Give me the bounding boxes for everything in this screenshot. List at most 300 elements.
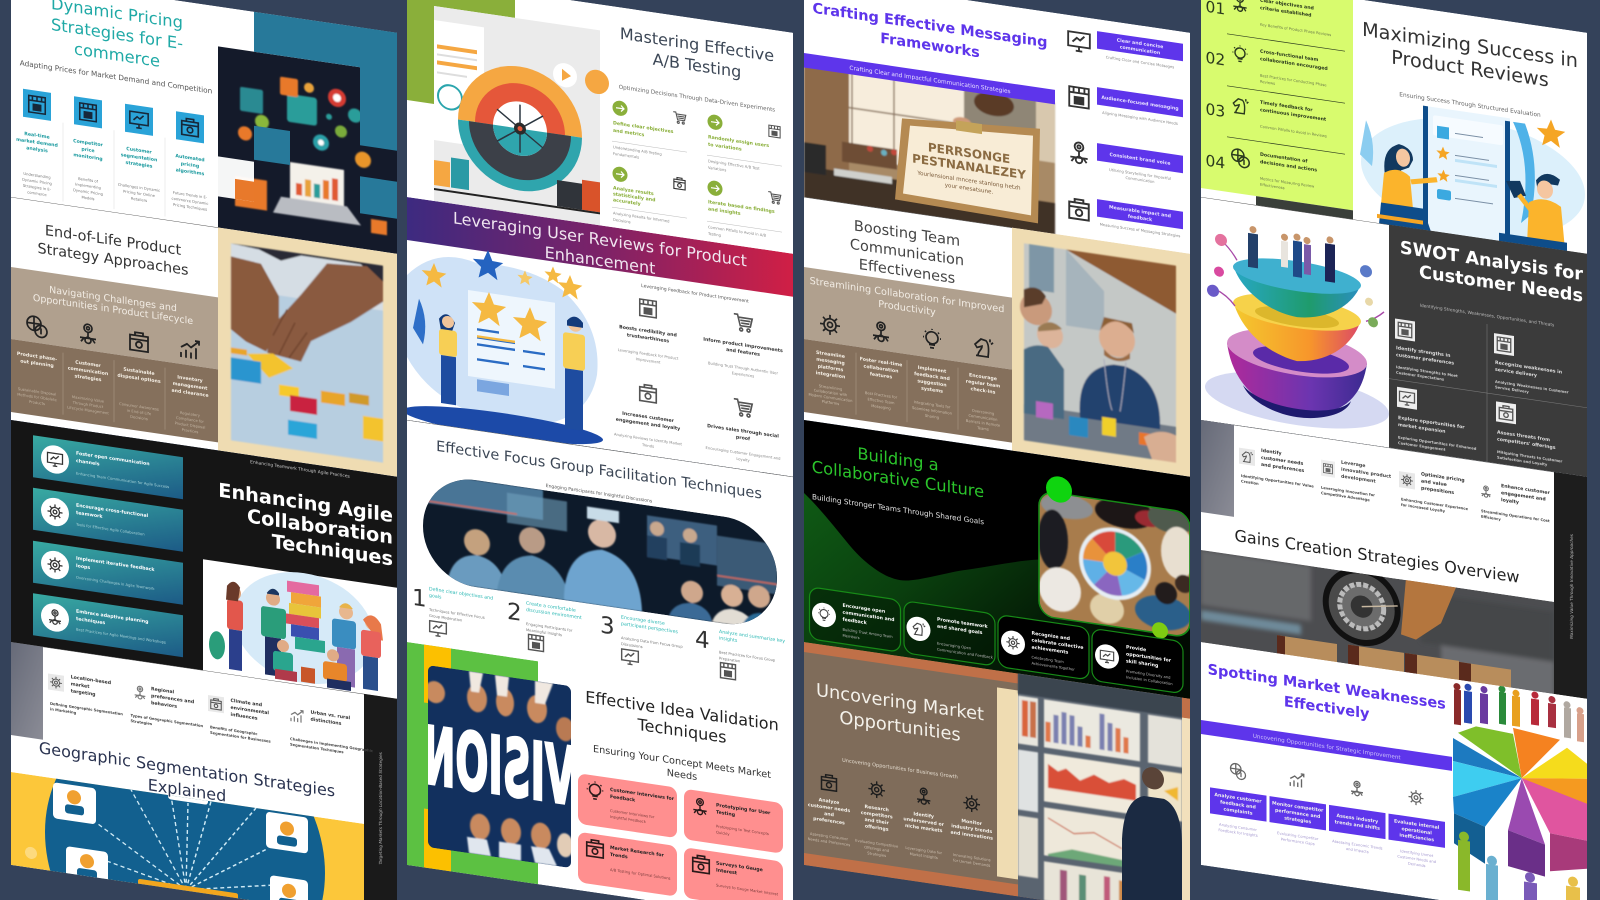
title: Strategies for E- (51, 15, 183, 53)
item: urban rural: distinctions (310, 717, 342, 727)
title: Spotting Market Weaknesses (1208, 661, 1446, 713)
item 04: 04 (1206, 152, 1225, 173)
item: suggestion systems: suggestion (917, 378, 947, 389)
title: commerce (74, 39, 160, 71)
green frame (407, 642, 538, 884)
icon: window (640, 384, 656, 403)
item: communication: communication (68, 365, 108, 377)
item: clear concise: Clear and concise (1117, 37, 1163, 50)
item: climate: environmental (230, 705, 269, 716)
item: analyze: accurately (613, 197, 641, 207)
item: internal: Identifying Unmet (1400, 849, 1434, 858)
item 1: Techniques for Effective Focus (428, 608, 485, 620)
card: cross-functional: teamwork (76, 510, 103, 520)
card: interviews: Insightful Feedback (610, 815, 647, 824)
icon: chess tile (1239, 448, 1255, 466)
card: prototyping: Prototyping for User (716, 802, 771, 817)
item: innovation: Leveraging Innovation for (1321, 486, 1375, 498)
item: iterate: Iterate based on findings (708, 199, 775, 215)
icon: tile (1397, 387, 1417, 410)
card: interviews (578, 773, 677, 838)
item: innovation: development (1341, 474, 1376, 485)
item 04: decisions and actions (1260, 159, 1317, 174)
item: engagement: Analyzing Reviews to Identify Market (614, 432, 683, 446)
title: Collaboration (247, 504, 393, 549)
icon: window (769, 125, 780, 138)
dark band (804, 339, 1012, 443)
icon: package (208, 695, 224, 713)
item: customer needs: Creation (1241, 479, 1259, 486)
card: skill sharing (1092, 628, 1183, 694)
item: regional (130, 683, 204, 734)
subtitle: Building Stronger Teams Through Shared Goals (812, 492, 984, 526)
item: real-time: Real-time (24, 131, 50, 141)
framed sign: Yourlensional mncere stanlong hetzh (916, 171, 1021, 192)
item: disposal (117, 330, 161, 423)
item: real-time collaboration: Effective Team (868, 397, 895, 405)
panel: collaborative culture (804, 420, 1196, 701)
photo: hands on sticky notes (231, 243, 383, 463)
black side strip (364, 694, 397, 900)
item: social proof: Drives sales through social (707, 423, 779, 440)
panel: geographic segmentation (11, 642, 397, 900)
item: measurable: Measuring Success of Messaging Strategies (1100, 222, 1180, 238)
icon: monitor (622, 649, 638, 666)
item: segmentation: Pricing for Online (123, 190, 156, 198)
item: competitor: Benefits of (78, 177, 99, 184)
item: analyze: Analyze results (613, 185, 654, 197)
item: industry (1329, 777, 1386, 857)
icon: monitor (430, 621, 446, 637)
icon: target (1481, 485, 1491, 498)
title: Uncovering Market (816, 680, 984, 725)
panel: market weaknesses (1201, 642, 1587, 900)
item: clear concise: Crafting Clear and Concise Messages (1106, 55, 1174, 69)
icon: target (1233, 0, 1247, 12)
icon: chess (1233, 97, 1248, 114)
framed sign (895, 107, 1040, 224)
item: check-ins: Encourage (969, 372, 997, 382)
cell: threats: Satisfaction and Loyalty (1497, 456, 1548, 467)
cell: strengths: Identify strengths in (1396, 345, 1450, 359)
item 04: Documentation of (1260, 152, 1308, 165)
item: check-ins: Teams (976, 426, 989, 432)
subtitle: Streamlining Collaboration for Improved (810, 276, 1004, 315)
cell: strengths (1395, 319, 1458, 384)
item 03: Timely feedback for (1260, 100, 1313, 113)
panel: user reviews (403, 196, 793, 480)
card: open communication: Encourage open (842, 603, 885, 615)
item: platforms: Collaboration with (814, 388, 848, 397)
framed sign: your enesatsune. (945, 183, 993, 196)
item: customer needs: customer needs (808, 802, 850, 814)
item: inventory: and clearance (171, 388, 209, 399)
item 04 (1206, 144, 1317, 195)
item: segmentation: strategies (126, 160, 153, 170)
item: disposal: in End-of-Life (127, 409, 152, 416)
item: competitor: performance and (1275, 808, 1320, 820)
item: inform improvements (703, 309, 783, 383)
item: internal: inefficiencies (1399, 832, 1434, 843)
item 2: Meaningful Insights (526, 628, 562, 637)
item 02: collaboration encouraged (1260, 56, 1328, 72)
item: assign users: Randomly assign users (708, 134, 769, 149)
item: phase-out: Sustainable Disposal (18, 387, 56, 397)
card: prototyping (684, 789, 783, 854)
dark strip (1256, 196, 1353, 220)
item: competitors (855, 778, 899, 860)
card: feedback loops: Overcoming Challenges in Agile Teamwork (76, 576, 155, 591)
subtitle: Ensuring Success Through Structured Evaluation (1399, 92, 1541, 119)
photo: gauge and wood blocks (1201, 544, 1554, 697)
item: climate: influences (230, 712, 258, 722)
card: adaptive planning: Best Practices for Agile Meetings and Workshops (76, 628, 166, 645)
item 04: Effectiveness (1260, 183, 1285, 190)
item: location-based: targeting (71, 688, 96, 698)
item 1: goals (429, 593, 442, 601)
item: suggestion systems: Seamless Information (912, 406, 953, 416)
icon: chess (975, 337, 993, 358)
item: real-time collaboration: Best Practices for (865, 391, 898, 400)
gray block (1201, 420, 1234, 517)
item: feedback (1210, 760, 1266, 839)
item: urban rural (290, 707, 373, 759)
item: real-time: Understanding (23, 172, 51, 180)
subtitle: Uncovering Opportunities for Business Growth (842, 758, 958, 781)
item 4: Analyze and summarize key (719, 629, 785, 645)
item: engagement: loyalty (1501, 497, 1519, 506)
icon: cart (673, 112, 686, 124)
item 2 (507, 598, 582, 657)
item: real-time (16, 88, 58, 199)
item: phase-out (17, 314, 57, 408)
title: Effectively (1284, 693, 1370, 723)
subtitle: Productivity (878, 299, 936, 318)
item: inform improvements: and features (726, 347, 760, 358)
cell: strengths: Identifying Strengths to Meet (1396, 365, 1458, 378)
item: inventory: Product Disposal (175, 421, 205, 430)
item: internal: Demands (1408, 862, 1426, 868)
item: competitor: monitoring (73, 152, 103, 162)
cell: weaknesses: service delivery (1495, 367, 1537, 379)
item: communication: Customer (75, 359, 101, 369)
item: climate (208, 694, 272, 744)
item 02: Cross-functional team (1260, 49, 1318, 63)
subtitle: Needs (667, 768, 697, 783)
item: customer needs: Analyze (819, 797, 839, 806)
card: surveys (684, 847, 783, 900)
title: Effectiveness (859, 256, 955, 287)
item 01: Key Benefits of Product Phase Reviews (1260, 23, 1331, 37)
card: prototyping: Quickly (716, 830, 730, 837)
item: iterate (707, 180, 782, 247)
title: Effective Focus Group Facilitation Techniques (436, 438, 762, 503)
item: analyze: statistically and (613, 191, 655, 204)
terracotta bands (804, 642, 1190, 900)
card: surveys: Surveys to Gauge Market Interest (716, 883, 779, 897)
item 3: Analyzing Data from Focus Group (621, 636, 683, 649)
subtitle band: Crafting Clear and Impactful Communication Strategies (849, 66, 1011, 95)
item: industry: Assess industry (1336, 813, 1378, 825)
item 2: 2 (507, 599, 522, 627)
item 4 (695, 625, 785, 687)
item: platforms: platforms (818, 364, 844, 373)
card: market research: Trends (610, 852, 628, 860)
gradient band (407, 197, 793, 297)
item: check-ins: Barriers in Remote (966, 419, 1001, 428)
item: inventory (171, 338, 209, 436)
item: competitor: Models (82, 195, 95, 201)
cell: opportunities (1397, 387, 1477, 457)
card: cross-functional: Encourage cross-functional (76, 503, 148, 519)
card: open communication: feedback (842, 617, 868, 626)
item 02: Best Practices for Conducting Phase (1260, 74, 1327, 88)
icon: chess (913, 622, 925, 636)
item: inventory: Inventory (177, 374, 203, 384)
card: achievements (998, 615, 1089, 680)
person silhouette (1142, 766, 1164, 791)
item 1 (412, 584, 493, 644)
item: social proof: Encouraging Customer Engagement and (706, 446, 781, 461)
icon: target (873, 321, 889, 342)
card: adaptive planning (33, 593, 183, 657)
teal frame blocks (254, 12, 397, 219)
item: engagement (614, 380, 683, 453)
item: check-ins (966, 336, 1001, 433)
icon: shop (74, 96, 102, 128)
icon: rocket (587, 780, 603, 800)
card: skill sharing: Provide (1126, 644, 1146, 653)
column 1 (11, 0, 397, 900)
item: industry: Assessing Economic Trends (1332, 839, 1383, 851)
divider lines (63, 123, 165, 217)
icon: cart (734, 399, 752, 418)
item: engagement (1481, 480, 1550, 529)
card: feedback loops: Implement iterative feedback (76, 556, 155, 573)
photo: fists around vision (423, 664, 575, 869)
item: regional: Types of Geographic Segmentation (130, 714, 204, 728)
item: customer needs: customer needs (1261, 455, 1303, 467)
panel: dynamic pricing (11, 0, 397, 256)
card: interviews: Customer Interviews for (610, 787, 675, 802)
item 1: Group Moderation (429, 614, 463, 623)
item: innovation: Leverage (1341, 460, 1365, 469)
illustration: layered funnel (1205, 218, 1389, 439)
column 2 (403, 0, 793, 900)
column 3 (804, 0, 1196, 900)
item: automated: commerce Dynamic (172, 197, 208, 206)
vertical caption: Targeting Markets Through Location-Based Strategies (378, 752, 383, 866)
item: engagement: Efficiency (1481, 515, 1501, 522)
card: adaptive planning: techniques (76, 616, 105, 626)
item: clear concise: communication (1120, 44, 1160, 56)
item: check-ins: Communication (968, 414, 998, 422)
item: niche markets: Identify (913, 811, 934, 820)
icon: businessman (1351, 781, 1363, 797)
icon: team (48, 503, 62, 521)
subtitle: Identifying Strengths, Weaknesses, Opportunities, and Threats (1420, 303, 1555, 329)
card: foster: Foster open communication (76, 451, 150, 467)
dark panel (1389, 225, 1587, 477)
item: competitors: Offerings and (864, 845, 890, 853)
panel: idea validation (407, 642, 793, 900)
cell: opportunities: Customer Engagement (1398, 441, 1446, 452)
item: phase-out: out planning (20, 358, 54, 369)
cream frame (218, 227, 397, 477)
item: suggestion systems: Sharing (925, 414, 940, 420)
icon: shop (640, 299, 656, 318)
item 02: 02 (1206, 49, 1225, 70)
cell: opportunities: Exploring Opportunities for Enhanced (1398, 435, 1477, 451)
title: Communication (850, 236, 964, 270)
item: customer needs: preferences (813, 816, 845, 827)
item: platforms: integration (816, 370, 845, 380)
item: inform improvements: Experiences (732, 371, 754, 379)
item: objectives: Fundamentals (613, 152, 639, 160)
item: platforms: Streamline (816, 350, 845, 360)
item: customer needs: Assessing Consumer (810, 832, 849, 842)
item: platforms: messaging (816, 357, 845, 367)
image: tech network and laptop (218, 46, 397, 256)
item: inventory: management (173, 381, 208, 392)
subtitle: Engaging Participants for Insightful Discussions (546, 483, 653, 505)
cell: threats: Assess threats from (1497, 430, 1550, 443)
item: clear concise (1068, 27, 1183, 71)
title: Crafting Effective Messaging (813, 0, 1047, 51)
item: segmentation (118, 103, 160, 205)
item: pricing (1399, 468, 1468, 517)
item: innovation: innovative product (1341, 467, 1392, 480)
icon: tile (1395, 319, 1415, 341)
item: competitor: Implementing (75, 182, 101, 190)
item: social proof: Loyalty (736, 457, 750, 463)
card: shared goals: Communication and Feedback (937, 648, 994, 660)
card: feedback loops: loops (76, 563, 90, 571)
item: real-time: market demand (16, 137, 58, 149)
title: Explained (148, 775, 226, 806)
item 03: Common Pitfalls to Avoid in Reviews (1260, 125, 1327, 138)
item 3: Encourage diverse (621, 614, 665, 627)
item: analyze (612, 166, 687, 233)
item: industry trends: Monitor (961, 818, 983, 827)
illustration: team stacking blocks (203, 558, 397, 700)
icon: coin globe (27, 315, 47, 338)
item: inventory: Compliance for (176, 416, 204, 424)
grid lines (1389, 310, 1587, 477)
item: customer needs: Identify (1261, 448, 1282, 457)
photo: futuristic meeting (423, 472, 777, 631)
item: automated: Automated (175, 153, 205, 163)
item: engagement: engagement and (1501, 490, 1546, 503)
item: pricing: Optimize pricing (1421, 471, 1465, 484)
illustration: review app (1360, 91, 1585, 255)
item: engagement: Trends (641, 443, 654, 449)
icon: gear head (1006, 635, 1020, 650)
cream blocks (997, 687, 1190, 900)
green wave (804, 493, 1190, 700)
item: industry trends: for Unmet Demands (953, 858, 990, 868)
item: brand voice (1070, 139, 1183, 188)
icon: monitor (125, 104, 153, 136)
item: urban rural: Challenges in Implementing Geographic (290, 737, 373, 753)
panel: idea validation: VISION (423, 709, 575, 824)
gray block (11, 642, 43, 740)
title: Gains Creation Strategies Overview (1235, 526, 1519, 587)
item 03 (1206, 92, 1327, 139)
subtitle: Adapting Prices for Market Demand and Competition (20, 58, 213, 96)
card: feedback loops (33, 541, 183, 605)
taupe band (11, 267, 218, 369)
title: Effective Idea Validation (585, 687, 779, 735)
title: Collaborative Culture (812, 457, 984, 501)
item 02 (1206, 40, 1328, 94)
subtitle: Leveraging Feedback for Product Improvement (641, 283, 749, 305)
item: communication: strategies (75, 373, 102, 383)
item: platforms (808, 312, 853, 408)
card: market research (578, 832, 677, 897)
item: competitor (1270, 769, 1326, 848)
card: open communication: Members (842, 634, 860, 640)
item: assign users (707, 114, 782, 181)
item: competitors: Evaluating Competitive (855, 839, 899, 849)
item: real-time collaboration: collaboration (864, 364, 898, 375)
card: foster (33, 435, 183, 499)
illustration: gauge (434, 6, 609, 228)
item 2: Create a comfortable (526, 601, 576, 614)
item: credibility: Improvement (636, 357, 661, 365)
cell: strengths: Customer Expectations (1396, 371, 1445, 382)
item: brand voice: Utilizing Storytelling for Impactful (1109, 168, 1171, 181)
card: skill sharing: opportunities for (1126, 651, 1172, 664)
item: climate: Benefits of Geographic (210, 725, 258, 736)
icon: target (1070, 141, 1088, 164)
item: feedback: Analyzing Consumer (1219, 823, 1257, 832)
photo: circle workshop (1038, 473, 1196, 644)
title: Opportunities (839, 707, 961, 746)
subtitle: Enhancing Teamwork Through Agile Practices (250, 459, 351, 480)
item 4: 4 (695, 626, 710, 654)
item: phase-out: Product phase- (17, 351, 57, 363)
cell: threats: competitors' offerings (1497, 437, 1556, 451)
cell: weaknesses (1494, 333, 1569, 400)
item: feedback: complaints (1223, 807, 1253, 817)
icon: gear (1408, 789, 1424, 806)
item: audience: Aligning Messaging with Audience Needs (1102, 111, 1178, 126)
framed sign: PESTNANALEZEY (912, 151, 1026, 182)
item: measurable: feedback (1128, 214, 1153, 223)
item: location-based: in Marketing (50, 707, 77, 715)
item: segmentation: Customer (126, 146, 152, 156)
green corner (407, 0, 515, 116)
icon: shop (1069, 86, 1089, 109)
icon: gears tile (1399, 471, 1415, 489)
icon: gear team (48, 556, 62, 574)
cell: weaknesses: Analyzing Weaknesses in Customer (1495, 380, 1569, 395)
card: interviews: Customer Interviews for (610, 809, 655, 819)
item 04: Metrics for Measuring Review (1260, 177, 1314, 189)
item: pricing: Enhancing Customer Experience (1401, 497, 1468, 511)
item: credibility: trustworthiness (627, 332, 669, 345)
item: competitors: and their (865, 817, 889, 827)
card: surveys: Interest (716, 867, 738, 877)
item: competitor (73, 96, 104, 203)
item: inventory: Practices (182, 428, 198, 434)
item: real-time: commerce (27, 190, 47, 197)
panel: end-of-life (11, 197, 397, 477)
card: market research: A/B Testing for Optimal Solutions (610, 868, 671, 881)
panel: gains creation (1201, 420, 1587, 702)
item 1: 1 (412, 585, 427, 613)
